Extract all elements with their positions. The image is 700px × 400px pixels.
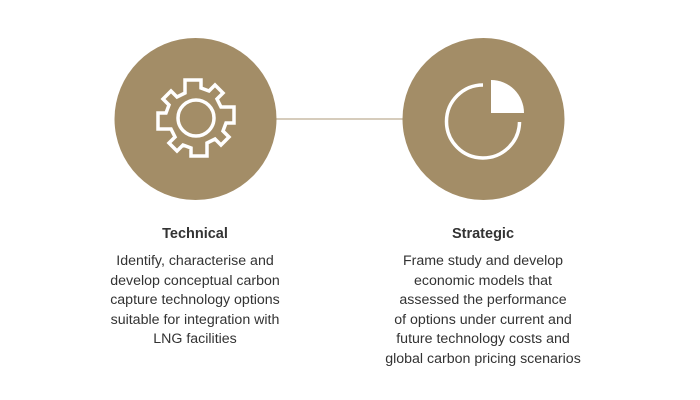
text: technical description: Identify, characterise and	[116, 253, 274, 269]
diagram: circles with icons	[114, 38, 564, 200]
icon: pie chart	[447, 80, 524, 158]
text: strategic description: economic models that	[414, 273, 552, 289]
text: strategic description: Frame study and develop	[403, 253, 563, 269]
text: strategic description: assessed the performance	[399, 292, 567, 308]
text: technical description	[110, 253, 280, 347]
heading: Technical: Technical	[162, 226, 228, 242]
text: technical description: capture technology options	[110, 292, 280, 308]
text: technical description: LNG facilities	[153, 331, 237, 347]
text: technical description: develop conceptual carbon	[110, 273, 280, 289]
circle: strategic	[402, 38, 564, 200]
heading: Strategic: Strategic	[452, 226, 514, 242]
connector line	[276, 118, 404, 120]
text: strategic description: future technology costs and	[396, 331, 570, 347]
text: technical description: suitable for integration with	[111, 312, 279, 328]
circle: technical	[114, 38, 276, 200]
text: strategic description	[385, 253, 581, 367]
icon: gear	[158, 80, 234, 156]
text: strategic description: of options under current and	[394, 312, 572, 328]
text: strategic description: global carbon pricing scenarios	[385, 351, 581, 367]
